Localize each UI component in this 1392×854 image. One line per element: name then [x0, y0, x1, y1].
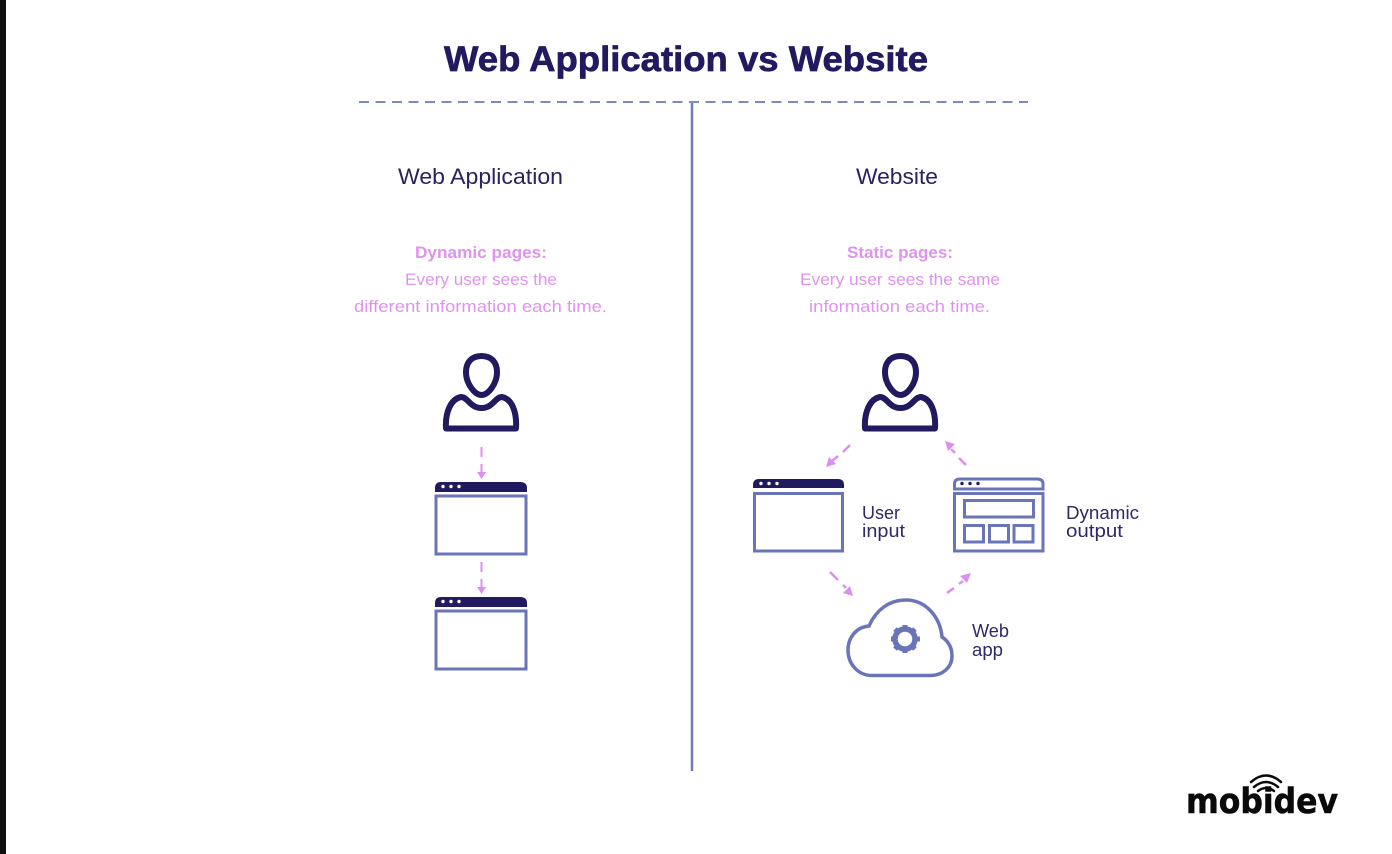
text block: dynamic pages: Dynamic pages: [415, 243, 547, 262]
text block: static pages: Every user sees the same [800, 270, 1000, 289]
label: user input: input [862, 521, 905, 541]
arrow: user to input [826, 445, 850, 467]
arrow: page to page [477, 562, 486, 594]
logo: mobidev: mobidev [1186, 782, 1338, 822]
title: Web Application vs Website [444, 40, 928, 79]
label: user input [862, 503, 905, 541]
text block: dynamic pages: different information each time. [354, 297, 607, 316]
panel: web application [354, 164, 607, 669]
icon: browser window 2 [435, 597, 527, 669]
label: web app: Web [972, 621, 1009, 641]
icon: cloud with gear [848, 600, 952, 676]
icon: wifi arcs [1251, 776, 1281, 791]
icon: browser window 1 [435, 482, 527, 554]
heading: web application: Web Application [398, 164, 563, 189]
text block: dynamic pages: Every user sees the [405, 270, 557, 289]
icon: user [865, 356, 935, 428]
label: dynamic output [1066, 503, 1139, 541]
label: user input: User [862, 503, 900, 523]
icon: browser window dynamic output [954, 479, 1043, 551]
label: dynamic output: output [1066, 521, 1123, 541]
arrow: user to page [477, 447, 486, 479]
text block: dynamic pages [354, 243, 607, 316]
arrow: web app to output [947, 573, 971, 593]
label: dynamic output: Dynamic [1066, 503, 1139, 523]
text block: static pages: information each time. [809, 297, 990, 316]
panel: website [753, 164, 1139, 676]
label: web app [972, 621, 1009, 660]
label: web app: app [972, 640, 1003, 660]
icon: user [446, 356, 516, 428]
heading: website: Website [856, 164, 938, 189]
text block: static pages: Static pages: [847, 243, 953, 262]
text block: static pages [800, 243, 1000, 316]
icon: browser window user input [753, 479, 844, 551]
arrow: input to web app [830, 572, 853, 596]
arrow: output to user [945, 441, 966, 465]
